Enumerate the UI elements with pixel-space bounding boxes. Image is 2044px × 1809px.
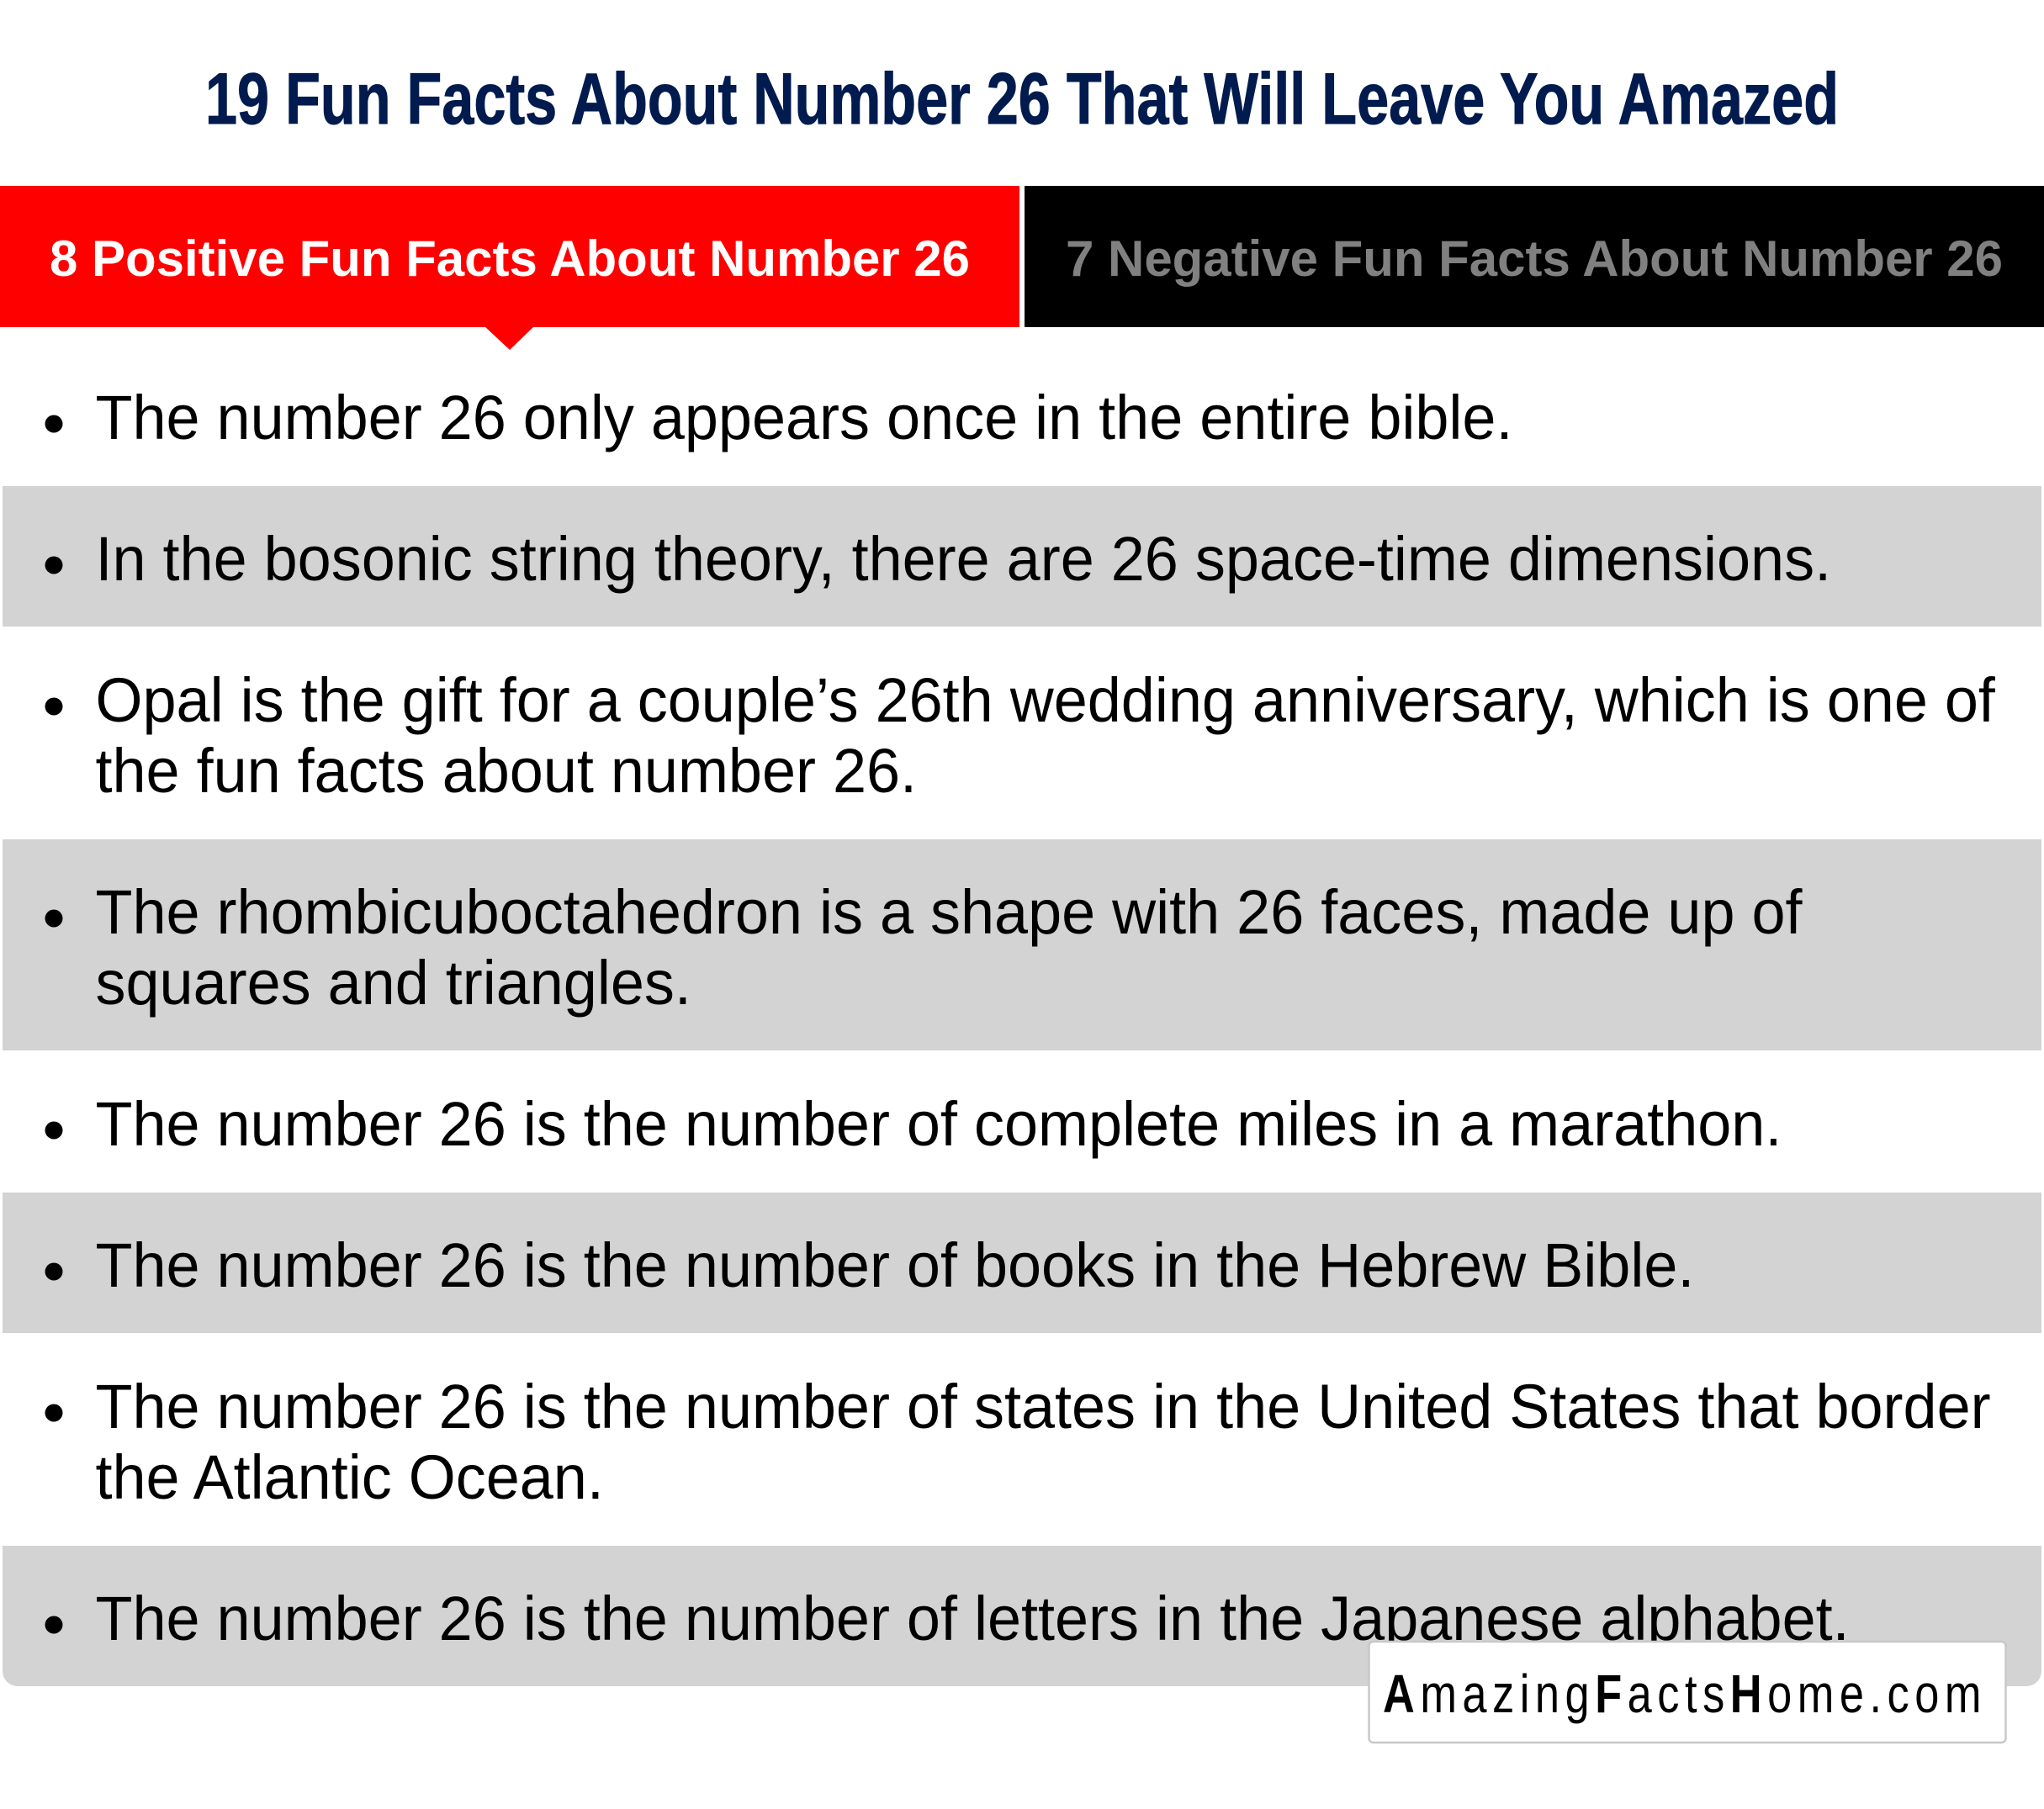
logo badge: AmazingFactsHome.com: AmazingFactsHome.com [1383,1664,1987,1724]
fact 4 [3,839,2041,1050]
tab: negative facts: 7 Negative Fun Facts About Number 26 [1066,230,2003,287]
fact 8 [3,1546,2041,1686]
fact 6: The number 26 is the number of books in the Hebrew Bible. [96,1231,1694,1300]
fact 7 [45,1373,1991,1512]
fact 7: the Atlantic Ocean. [96,1443,604,1512]
fact 1: The number 26 only appears once in the entire bible. [96,383,1512,452]
tab: positive facts [0,186,1019,350]
fact 3: the fun facts about number 26. [96,737,917,806]
tab: positive facts: 8 Positive Fun Facts About Number 26 [50,230,970,287]
fact 2: In the bosonic string theory, there are 26 space-time dimensions. [96,525,1831,594]
fact 2 [3,486,2041,627]
fact 4: The rhombicuboctahedron is a shape with 26 faces, made up of [96,878,1803,947]
fact 5: The number 26 is the number of complete miles in a marathon. [96,1090,1782,1159]
fact 3 [45,666,1996,806]
logo badge: AmazingFactsHome.com [1369,1642,2005,1743]
fact 6 [3,1193,2041,1333]
tab: negative facts [1025,186,2044,327]
fact list panel [3,383,2041,1686]
fact 4: squares and triangles. [96,949,691,1018]
fact 7: The number 26 is the number of states in the United States that border [96,1373,1991,1441]
fact 3: Opal is the gift for a couple’s 26th wedding anniversary, which is one of [96,666,1996,735]
fact 8: The number 26 is the number of letters in the Japanese alphabet. [96,1584,1850,1653]
